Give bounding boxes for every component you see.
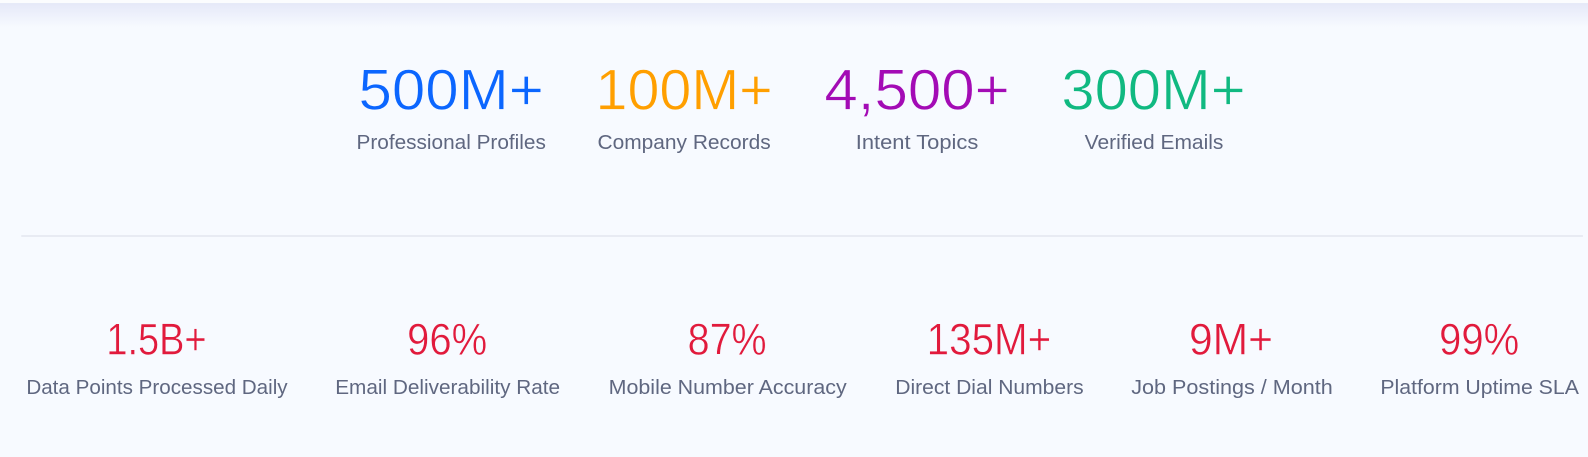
stat: verified emails: 300M+ [1061,58,1246,122]
stat: intent topics: Intent Topics [856,131,978,154]
stat: job postings per month [1131,315,1333,399]
stat: professional profiles: 500M+ [359,58,544,122]
stat: platform uptime sla [1380,315,1579,399]
stat: company records: 100M+ [596,58,773,122]
stat: data points processed daily [26,315,288,399]
stat: verified emails: Verified Emails [1085,131,1223,154]
stat: direct dial numbers: Direct Dial Numbers [895,376,1084,399]
stat: company records: Company Records [598,131,771,154]
stat: email deliverability rate: Email Deliverability Rate [335,376,560,399]
stat: verified emails [1061,58,1246,154]
stat: email deliverability rate [335,315,560,399]
stat: job postings per month: Job Postings / Month [1131,376,1333,399]
stat: mobile number accuracy: 87% [688,315,767,364]
stat: company records [596,58,773,154]
stat: intent topics [824,58,1010,154]
stat: job postings per month: 9M+ [1189,315,1273,364]
stat: direct dial numbers: 135M+ [927,315,1051,364]
stat: mobile number accuracy [609,315,847,399]
stat: intent topics: 4,500+ [824,58,1010,122]
stat: platform uptime sla: 99% [1439,315,1519,364]
stat: data points processed daily: Data Points Processed Daily [26,376,288,399]
stat: mobile number accuracy: Mobile Number Accuracy [609,376,847,399]
stat: data points processed daily: 1.5B+ [106,315,207,364]
stat: direct dial numbers [895,315,1084,399]
stat: email deliverability rate: 96% [407,315,487,364]
stat: professional profiles [356,58,546,154]
stat: platform uptime sla: Platform Uptime SLA [1380,376,1579,399]
stat: professional profiles: Professional Profiles [356,131,546,154]
